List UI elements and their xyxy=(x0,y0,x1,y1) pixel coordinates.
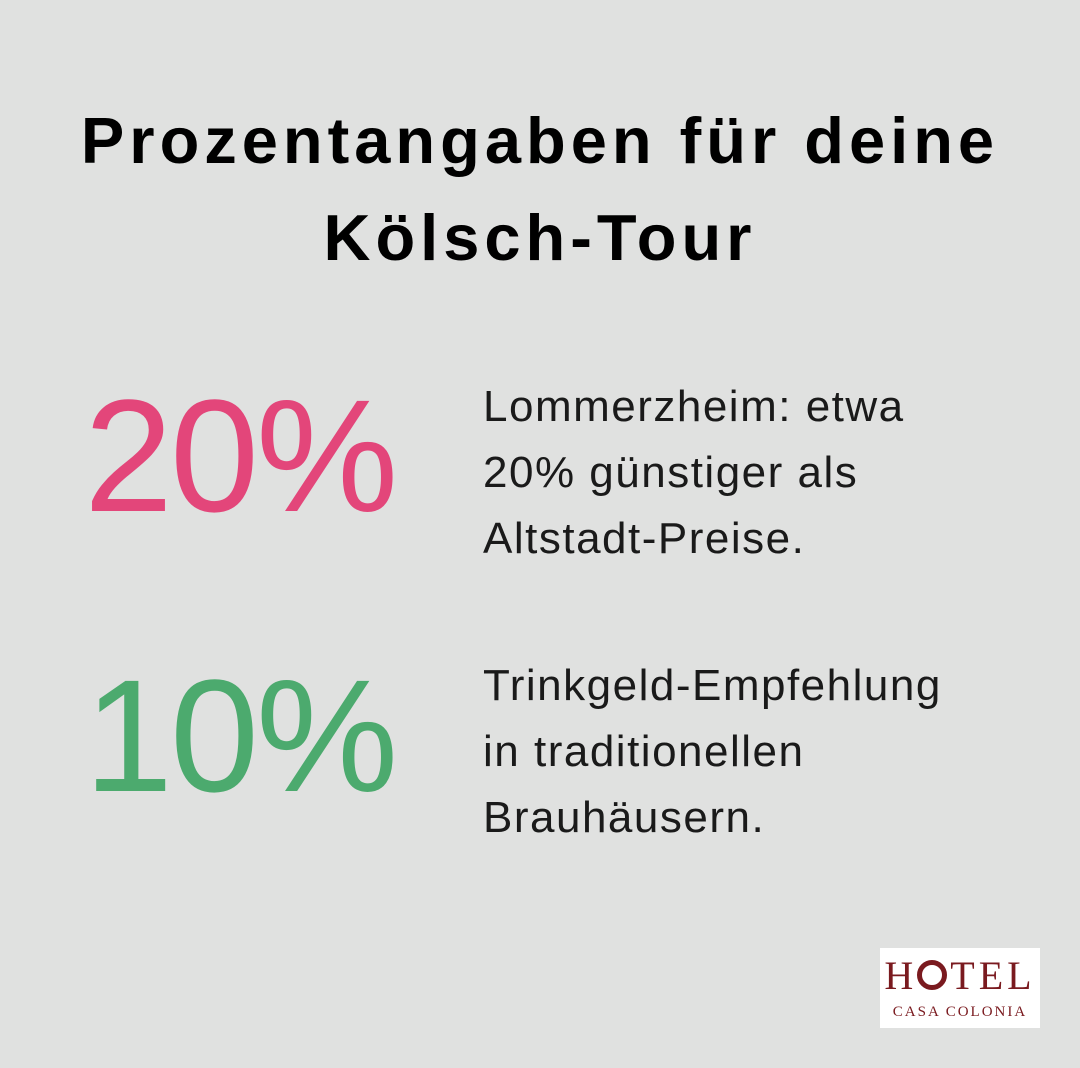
title xyxy=(81,104,999,274)
text: Lommerzheim: 20% günstiger als xyxy=(483,448,858,497)
text: Lommerzheim: Lommerzheim: etwa xyxy=(483,382,905,431)
title: Prozentangaben für deine xyxy=(81,104,999,177)
text: Trinkgeld: Trinkgeld-Empfehlung xyxy=(483,661,942,710)
text: Lommerzheim: Altstadt-Preise. xyxy=(483,514,805,563)
logo xyxy=(880,948,1040,1028)
text: Lommerzheim xyxy=(483,382,905,563)
text: Trinkgeld: in traditionellen xyxy=(483,727,804,776)
text: Trinkgeld xyxy=(483,661,942,842)
title: Kölsch-Tour xyxy=(324,201,756,274)
stat: 20%: 20% xyxy=(84,366,395,545)
logo: H TEL xyxy=(884,953,1036,998)
stat: 10%: 10% xyxy=(84,646,395,825)
logo: CASA COLONIA xyxy=(893,1004,1027,1020)
text: Trinkgeld: Brauhäusern. xyxy=(483,793,765,842)
